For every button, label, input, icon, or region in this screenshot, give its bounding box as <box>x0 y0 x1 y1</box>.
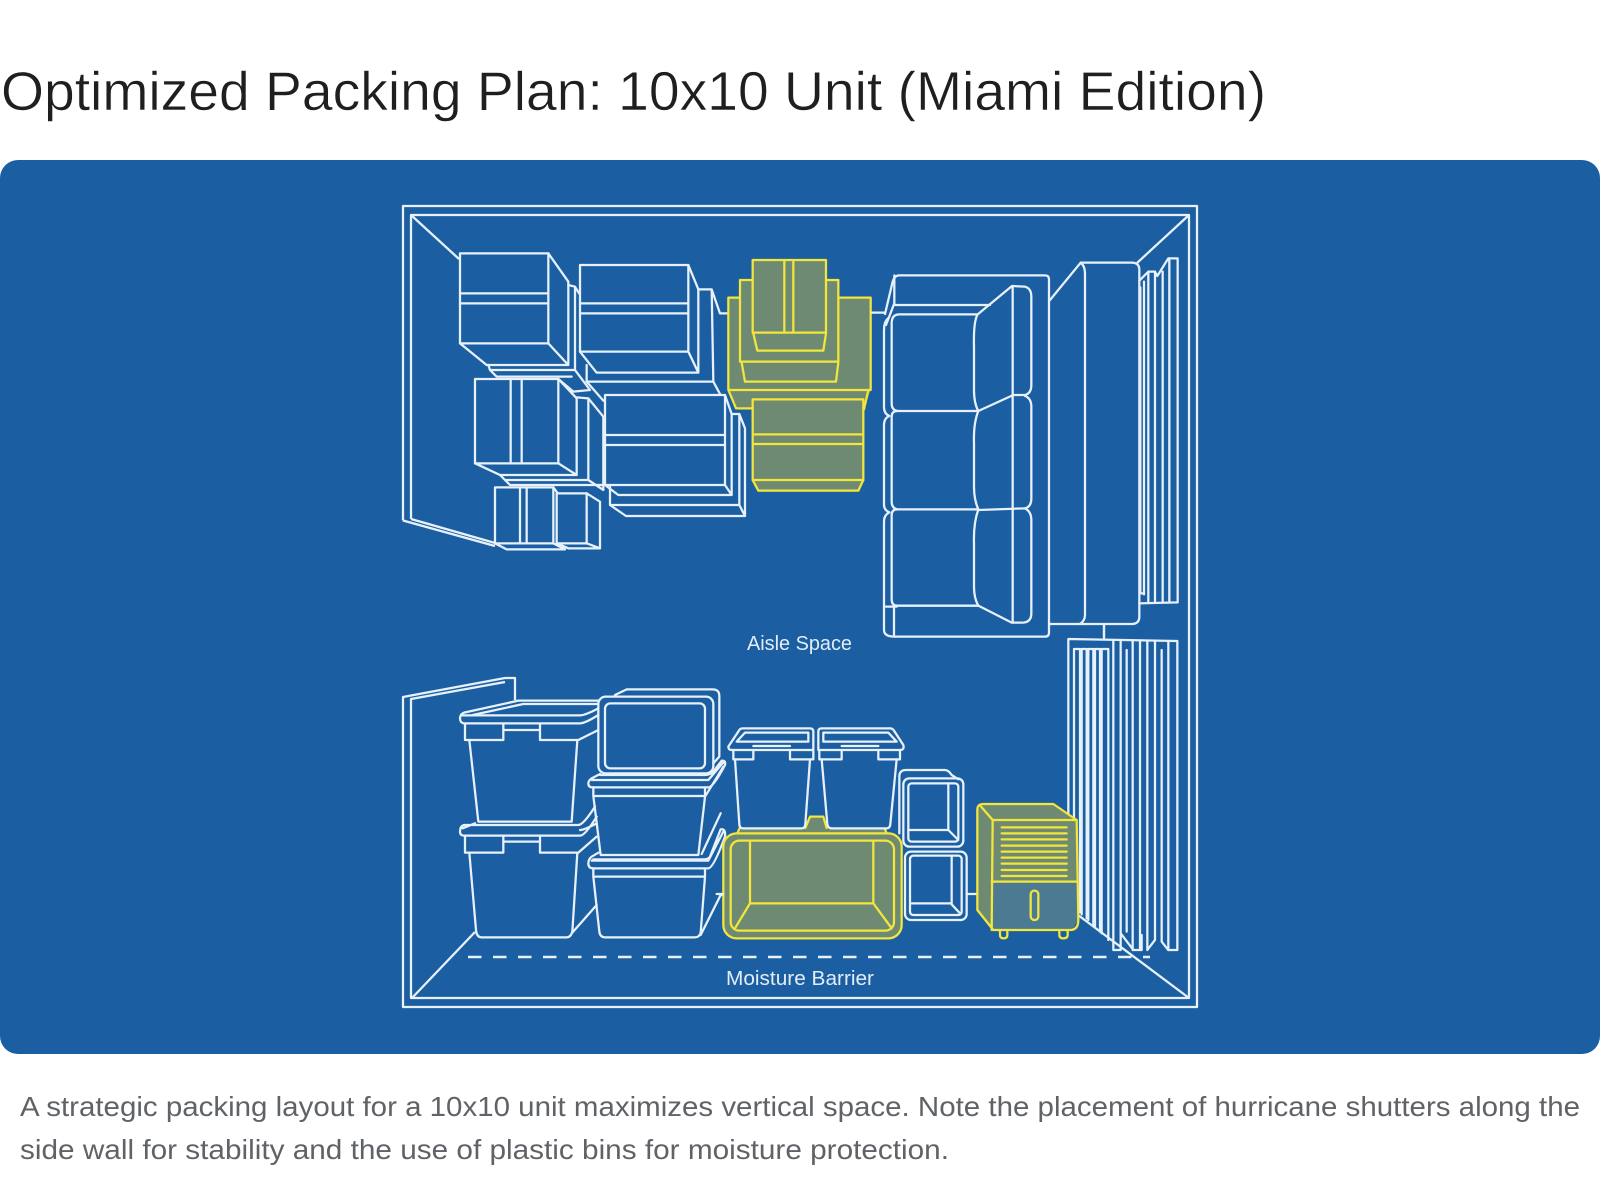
connector from stack to sofa <box>872 309 885 316</box>
box: upper middle <box>580 265 728 401</box>
bin: small left <box>728 728 813 828</box>
plastic bins: small front <box>717 728 977 920</box>
unit frame walls <box>403 206 1197 1007</box>
small cube bins <box>899 770 967 920</box>
hurricane shutters: upper wall <box>1139 258 1178 603</box>
stacked cardboard boxes <box>460 253 745 549</box>
connectors beside bins <box>717 891 977 897</box>
bin: small right <box>818 728 904 828</box>
caption <box>20 1091 1580 1165</box>
panel: blueprint floor plan <box>0 160 1600 1054</box>
highlighted heavy boxes stack <box>728 260 871 492</box>
caption: A strategic packing layout for a 10x10 unit maximizes vertical space. Note the placement of hurricane shutters along the <box>20 1091 1580 1122</box>
hurricane shutters: lower wall <box>1068 625 1177 950</box>
box: middle right <box>605 395 745 516</box>
label: moisture barrier: Moisture Barrier <box>726 968 874 990</box>
bin: center middle <box>588 761 725 855</box>
box: small low left <box>495 487 565 549</box>
caption: side wall for stability and the use of plastic bins for moisture protection. <box>20 1134 949 1165</box>
bin: top middle <box>598 689 719 773</box>
plastic bins: left stacks <box>460 689 725 937</box>
bin: lower left <box>460 807 597 937</box>
moisture barrier dashed line <box>468 956 1150 958</box>
standing mattress <box>1050 263 1139 637</box>
box: small low right <box>553 487 600 548</box>
highlighted bin <box>723 817 902 938</box>
title: Optimized Packing Plan: 10x10 Unit (Miami Edition) <box>1 60 1266 122</box>
bin: upper left <box>460 701 598 822</box>
label: aisle space: Aisle Space <box>747 633 852 655</box>
bin: bottom middle <box>588 829 725 937</box>
box: middle left <box>475 379 603 490</box>
box: upper left <box>460 253 590 392</box>
dehumidifier <box>977 804 1078 938</box>
sofa <box>872 275 1049 637</box>
